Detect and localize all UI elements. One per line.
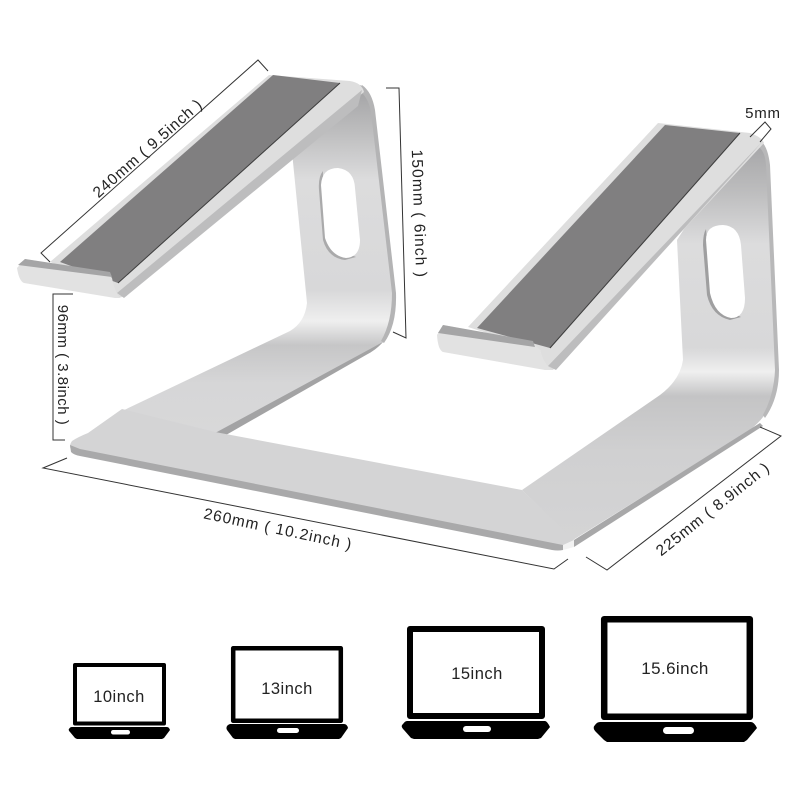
laptop icon: 15.6inch: 15.6inch <box>641 659 709 678</box>
base plate right edge <box>574 423 763 547</box>
dimension: 240mm <box>41 60 268 262</box>
right slot bevel <box>703 229 741 320</box>
plate surface <box>468 123 764 370</box>
dimension: 260mm <box>43 458 568 569</box>
laptop icon: 15inch: 15inch <box>451 665 503 683</box>
base corner glint <box>563 540 574 550</box>
laptop icon: 15.6inch <box>594 619 757 742</box>
left top plate <box>17 75 364 298</box>
dimension: 240mm: 240mm ( 9.5inch ) <box>90 96 206 201</box>
lip top edge <box>438 325 535 347</box>
gray pad <box>477 125 740 348</box>
dimension: 150mm: 150mm ( 6inch ) <box>408 149 429 278</box>
front lip <box>437 325 552 370</box>
plate surface <box>50 75 364 298</box>
front lip <box>17 259 120 298</box>
dimension: 5mm thickness <box>745 105 781 142</box>
plate underside <box>548 142 762 370</box>
base plate <box>70 409 574 546</box>
dimension: 225mm <box>586 427 781 570</box>
left arm underside <box>215 342 383 435</box>
laptop icon: 13inch: 13inch <box>261 680 313 698</box>
laptop icon: 13inch <box>226 648 348 739</box>
dimension: 150mm <box>386 88 429 338</box>
right upright outer edge <box>757 142 779 418</box>
left upright and arm <box>120 85 395 433</box>
gray pad <box>60 75 340 283</box>
right upright and arm <box>522 140 778 540</box>
plate underside <box>117 90 362 298</box>
right slot <box>706 225 745 318</box>
pad shadow line <box>550 133 740 348</box>
dimension: 225mm: 225mm ( 8.9inch ) <box>653 459 773 560</box>
laptop icon: 15inch <box>402 629 550 739</box>
pad shadow line <box>118 83 340 283</box>
left upright outer edge <box>358 85 396 343</box>
left slot <box>321 168 360 258</box>
dimension: 5mm thickness: 5mm <box>745 105 781 122</box>
laptop icon: 10inch <box>69 665 170 739</box>
right top plate <box>437 123 764 370</box>
stand: aluminium body <box>70 85 779 550</box>
dimension: 260mm: 260mm ( 10.2inch ) <box>202 506 354 554</box>
base plate front edge <box>70 445 563 550</box>
left slot bevel <box>319 171 356 260</box>
lip top edge <box>18 259 112 277</box>
laptop icon: 10inch: 10inch <box>93 688 145 706</box>
dimension: 96mm: 96mm ( 3.8inch ) <box>54 305 71 425</box>
